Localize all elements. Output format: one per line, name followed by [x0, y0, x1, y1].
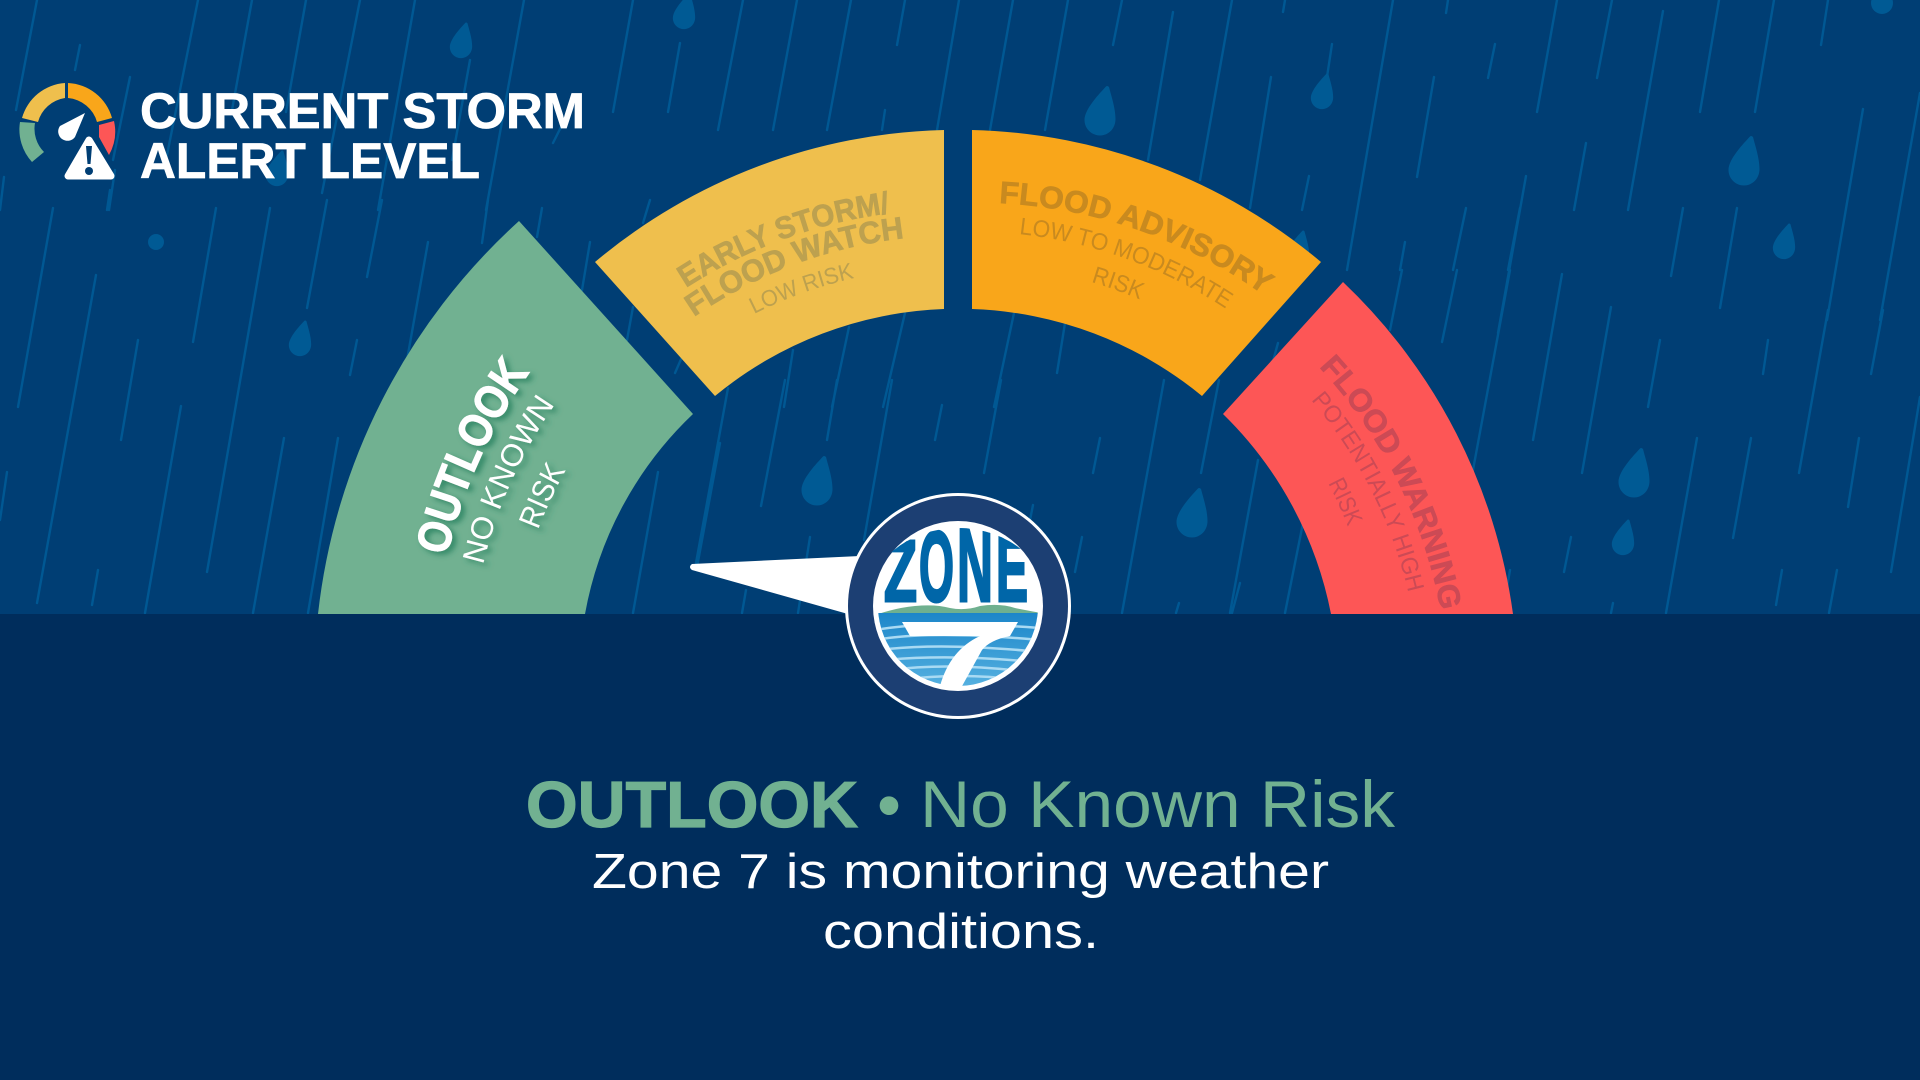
gauge segment: flood advisory	[972, 130, 1321, 396]
gauge needle pointer	[690, 556, 860, 614]
logo: Zone 7: Z	[884, 523, 917, 620]
segment label: flood warning: RISK	[1329, 477, 1363, 526]
segment label: early storm: LOW RISK	[748, 263, 854, 314]
rain streaks	[0, 0, 1920, 613]
status heading: •	[878, 768, 900, 841]
segment label: outlook: OUTLOOK	[418, 354, 536, 558]
segment label: flood warning: FLOOD WARNING	[1320, 354, 1460, 608]
segment label: outlook	[418, 354, 571, 568]
status heading: OUTLOOK	[526, 768, 858, 841]
segment label: flood advisory: LOW TO MODERATE	[1020, 218, 1234, 308]
logo: Zone 7: E	[996, 517, 1028, 621]
logo: Zone 7: O	[919, 511, 954, 623]
status description: Zone 7 is monitoring weather	[592, 845, 1329, 899]
rain drops	[148, 0, 1893, 555]
title: ALERT LEVEL	[140, 133, 480, 189]
segment label: flood advisory: FLOOD ADVISORY	[1000, 181, 1276, 290]
sky background	[0, 0, 1920, 614]
segment label: outlook: NO KNOWN	[462, 394, 560, 568]
status heading: No Known Risk	[920, 767, 1396, 841]
gauge segment: flood warning	[1223, 282, 1513, 614]
logo: Zone 7: N	[957, 504, 993, 624]
logo: Zone 7	[845, 493, 1071, 719]
status description	[592, 845, 1329, 959]
segment label: early storm: FLOOD WATCH	[684, 216, 903, 316]
title: CURRENT STORM	[140, 83, 585, 139]
segment label: flood advisory: RISK	[1092, 266, 1145, 300]
segment label: flood warning: POTENTIALLY HIGH	[1312, 391, 1424, 591]
icon: gauge with warning triangle	[19, 83, 115, 176]
lower panel	[0, 614, 1920, 1080]
status heading	[526, 767, 1396, 841]
segment label: early storm: EARLY STORM/	[676, 190, 887, 288]
title	[140, 83, 585, 189]
gauge segment: outlook (active)	[318, 221, 693, 614]
status description: conditions.	[823, 905, 1099, 959]
gauge segment: early storm / flood watch	[595, 130, 944, 396]
segment label: outlook: RISK	[519, 462, 571, 534]
